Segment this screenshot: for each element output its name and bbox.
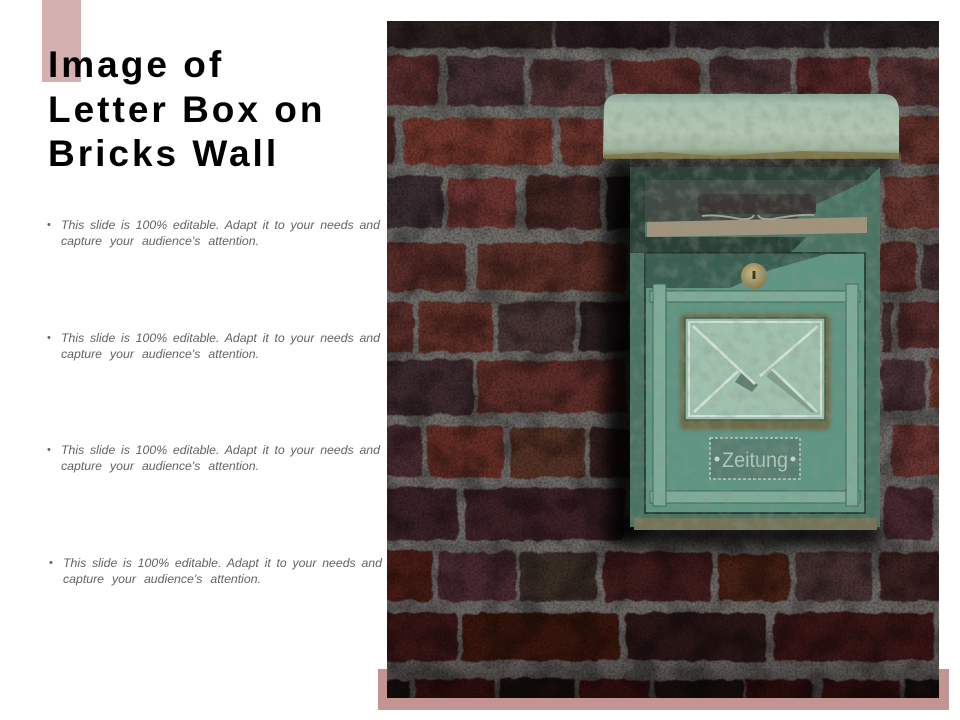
- photo: letter box on brick wall: [387, 21, 939, 698]
- wall grain: [387, 21, 939, 698]
- bullet text 1: •: [47, 219, 51, 231]
- mailbox cast shadow: [606, 155, 895, 546]
- bullet text 2: capture your audience's attention.: [61, 347, 259, 361]
- bullet text 3: This slide is 100% editable. Adapt it to your needs and: [61, 443, 380, 457]
- metal patina: [603, 94, 899, 530]
- bullet text 4: This slide is 100% editable. Adapt it to your needs and: [63, 556, 382, 570]
- bullet text 2: [47, 331, 380, 361]
- bullet text 2: This slide is 100% editable. Adapt it to your needs and: [61, 331, 380, 345]
- bullet text 4: •: [49, 557, 53, 569]
- top flap: [645, 180, 867, 237]
- roof rust edge: [604, 151, 899, 159]
- flap shadow: [645, 180, 867, 222]
- mortar background: [387, 21, 939, 698]
- door top shadow: [645, 253, 830, 288]
- bullet text 3: capture your audience's attention.: [61, 459, 259, 473]
- Zeitung plate: Zeitung: [722, 449, 788, 472]
- title: [48, 44, 325, 174]
- roof: [603, 94, 899, 158]
- brick courses: [375, 12, 946, 705]
- accent block top left: [42, 0, 81, 82]
- letter box: [603, 94, 899, 530]
- door: [645, 253, 865, 513]
- nameplate: [698, 194, 816, 214]
- body shadow wedge: [630, 167, 880, 253]
- bullet text 2: •: [47, 332, 51, 344]
- box body: [630, 167, 880, 527]
- Zeitung plate: [710, 438, 800, 479]
- lock: [741, 263, 767, 289]
- bullet text 1: This slide is 100% editable. Adapt it to your needs and: [61, 218, 380, 232]
- rust around envelope: [680, 314, 830, 430]
- bullet text 4: [49, 556, 382, 586]
- title: Image of: [48, 44, 224, 85]
- flap tan strip: [647, 217, 867, 237]
- door frame mouldings: [650, 284, 860, 506]
- accent bar bottom right: [378, 669, 949, 710]
- bottom strip: [634, 518, 877, 530]
- title: Bricks Wall: [48, 133, 279, 174]
- wall mottling: [387, 21, 939, 698]
- bullet text 3: [47, 443, 380, 473]
- bullet text 1: [47, 218, 380, 248]
- bullet text 1: capture your audience's attention.: [61, 234, 259, 248]
- envelope relief: [685, 318, 825, 420]
- bullet text 4: capture your audience's attention.: [63, 572, 261, 586]
- bullet text 3: •: [47, 444, 51, 456]
- nameplate scroll: [702, 215, 814, 219]
- title: Letter Box on: [48, 88, 325, 130]
